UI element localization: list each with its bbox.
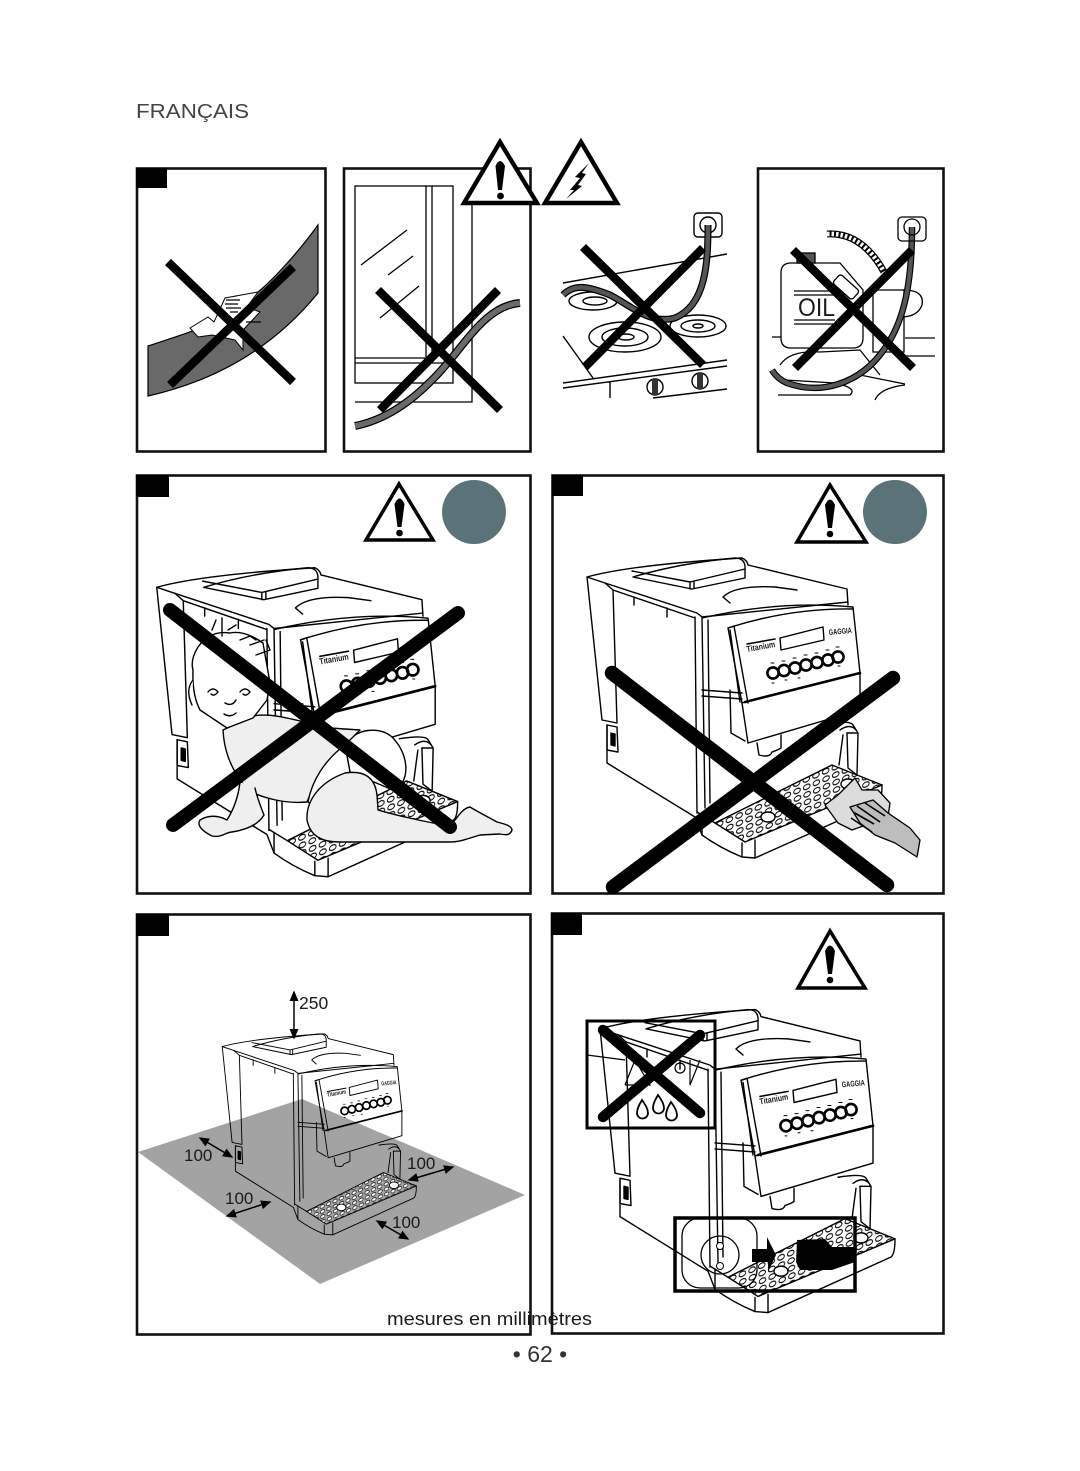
- floor area: [138, 1099, 525, 1284]
- dimension labels: 100: [407, 1154, 435, 1173]
- dimension labels: 250: [299, 993, 328, 1013]
- machine drawing: [157, 568, 458, 877]
- icon: electric hazard triangle: [545, 142, 617, 203]
- dimension arrows: [200, 992, 453, 1239]
- page number: • 62 •: [513, 1341, 567, 1367]
- machine drawing: [600, 1010, 895, 1313]
- machine drawing: Titanium: [319, 651, 350, 667]
- inset: water leak: [587, 1021, 715, 1128]
- prohibition cross: [612, 673, 893, 887]
- machine drawing: GAGGIA: [841, 1078, 865, 1089]
- dimension labels: 100: [392, 1213, 420, 1232]
- dimension labels: 100: [225, 1189, 253, 1208]
- machine drawing: GAGGIA: [828, 626, 852, 637]
- panel: do not clean while running: [552, 475, 944, 894]
- panel: installation clearances: [136, 914, 530, 1334]
- panel: child under machine: [136, 475, 530, 894]
- dimension labels: 100: [184, 1146, 212, 1165]
- icon: warning triangle: [366, 484, 433, 540]
- machine drawing: Titanium: [327, 1089, 347, 1099]
- panel: cable in window: [344, 168, 530, 452]
- machine drawing: [222, 1034, 416, 1235]
- icon: warning triangle: [797, 485, 866, 542]
- illustration: baby: [189, 618, 512, 842]
- machine drawing: Titanium: [746, 639, 776, 654]
- icon: warning triangle: [798, 931, 865, 988]
- prohibition cross: [170, 610, 458, 827]
- inset: drip tray fixing: [675, 1218, 855, 1291]
- machine drawing: Titanium: [759, 1091, 789, 1106]
- panel: leakage and drip tray: [551, 913, 944, 1334]
- icon: blue-grey disc: [863, 480, 927, 544]
- illustration: cloth and hand: [825, 778, 920, 857]
- caption: measurements: mesures en millimètres: [387, 1309, 592, 1329]
- panel: damaged cable: [136, 168, 326, 452]
- machine drawing: [587, 558, 882, 858]
- dimension labels: [184, 993, 435, 1232]
- machine drawing: GAGGIA: [381, 1080, 397, 1087]
- panel: cable near oil: [758, 168, 944, 452]
- icon: blue-grey disc: [442, 480, 506, 544]
- illustration: cable on stove: [563, 213, 727, 398]
- panel: cable near oil: OIL: [798, 294, 835, 322]
- title: language heading: FRANÇAIS: [136, 100, 249, 123]
- icon: warning triangle: [464, 142, 537, 203]
